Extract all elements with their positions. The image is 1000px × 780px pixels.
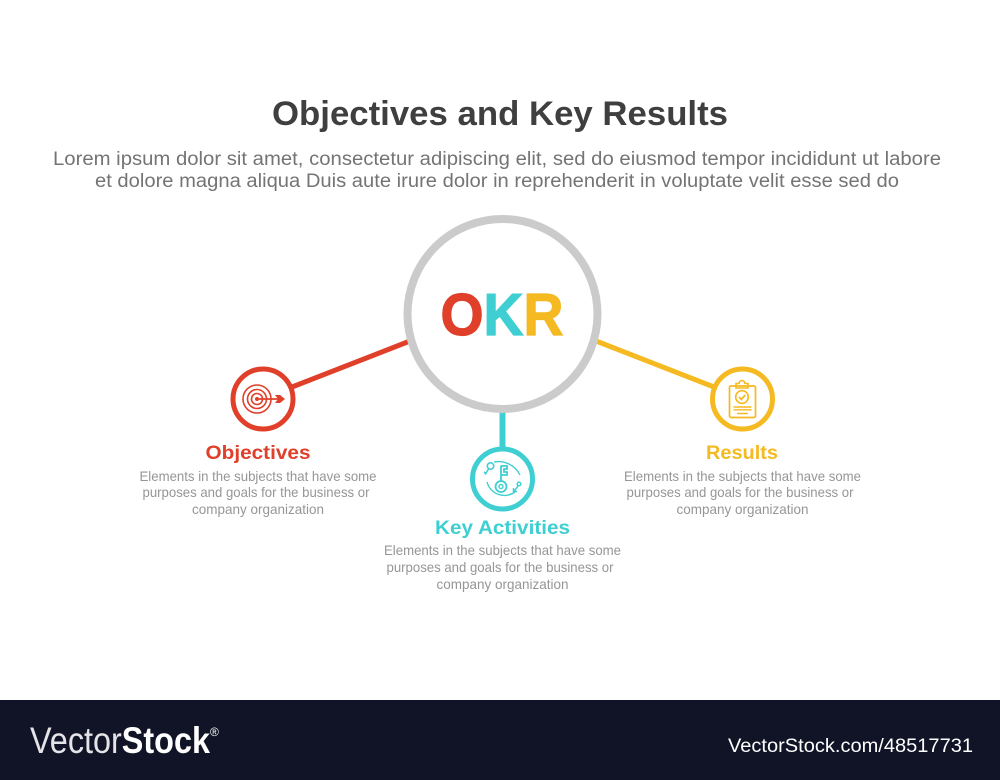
description: objectives: Elements in the subjects that have some — [140, 468, 377, 484]
footer bar — [0, 700, 1000, 780]
description: key activities: purposes and goals for the business or — [386, 559, 614, 575]
icon: target in circle — [233, 369, 293, 429]
description: objectives — [140, 468, 377, 517]
description: key activities — [384, 542, 621, 592]
icon: clipboard in circle — [712, 369, 772, 429]
icon: key in circle — [472, 449, 532, 509]
description: results — [624, 468, 861, 517]
block: objectives — [140, 443, 377, 517]
heading: key activities: Key Activities — [435, 518, 570, 539]
title: Objectives and Key Results — [272, 95, 728, 133]
description: key activities: company organization — [436, 576, 568, 592]
description: results: company organization — [676, 501, 808, 517]
central circle — [408, 219, 598, 409]
footer logo: VectorStock — [30, 720, 210, 761]
connector: results — [596, 341, 714, 387]
description: results: purposes and goals for the business or — [626, 484, 854, 500]
description: results: Elements in the subjects that have some — [624, 468, 861, 484]
subtitle text: Lorem ipsum dolor sit amet, consectetur adipiscing elit, sed do eiusmod tempor incididunt ut labore — [53, 149, 941, 170]
registered mark: ® — [210, 725, 219, 739]
connector: key activities — [500, 410, 506, 448]
footer id: VectorStock.com/48517731 — [728, 736, 973, 757]
connector: objectives — [292, 341, 410, 387]
description: objectives: company organization — [192, 501, 324, 517]
block: key activities — [384, 518, 621, 592]
subtitle text: et dolore magna aliqua Duis aute irure dolor in reprehenderit in voluptate velit esse sed do — [95, 171, 899, 192]
description: objectives: purposes and goals for the business or — [142, 484, 370, 500]
block: results — [624, 443, 861, 517]
OKR label: OKR — [440, 282, 564, 348]
heading: objectives: Objectives — [206, 443, 310, 464]
description: key activities: Elements in the subjects that have some — [384, 542, 621, 558]
heading: results: Results — [706, 443, 778, 464]
subtitle text — [53, 149, 941, 192]
